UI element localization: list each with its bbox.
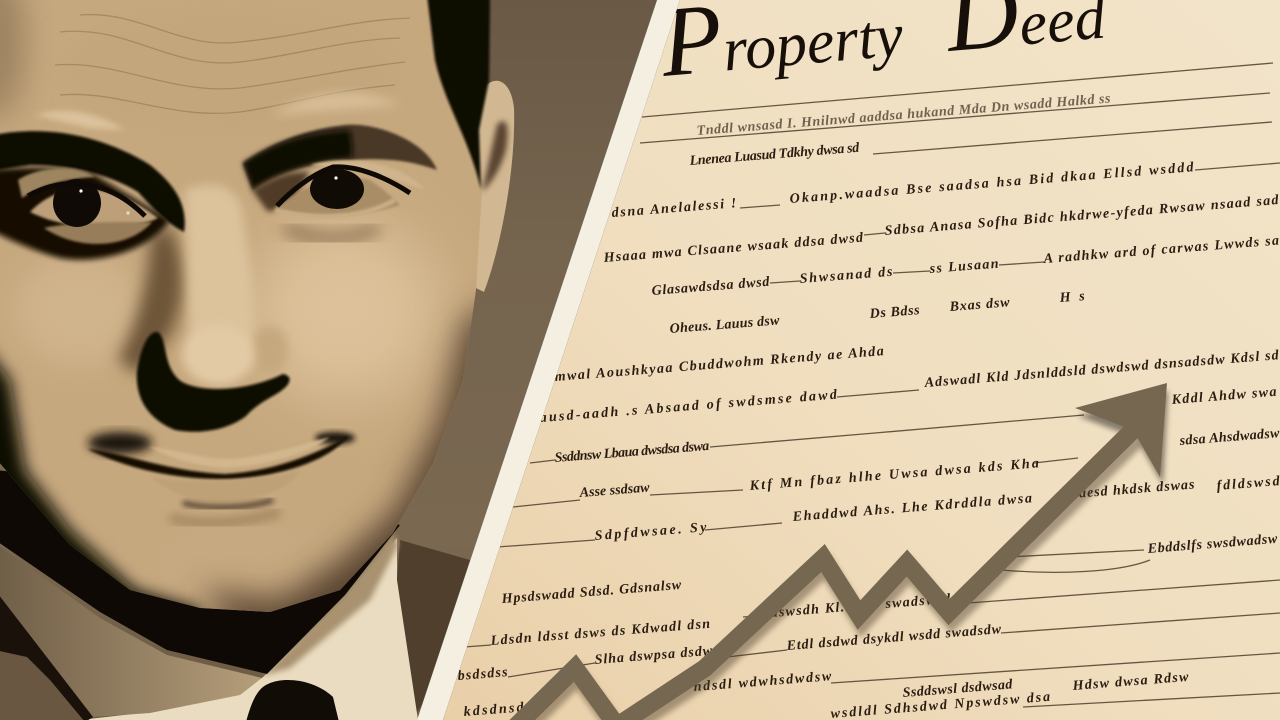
handwriting: dsna Anelalessi ! xyxy=(611,196,737,221)
handwriting: Hsaaa mwa Clsaane wsaak ddsa dwsd xyxy=(602,231,865,266)
handwriting: Tnddl wnsasd I. Hnilnwd aaddsa hukand Mda Dn wsadd Halkd ss xyxy=(696,91,1112,139)
handwriting: mwal Aoushkyaa Cbuddwohm Rkendy ae Ahda xyxy=(554,344,884,385)
handwriting: Etdl dsdwd dsykdl wsdd swadsdw xyxy=(785,622,1002,654)
right nose wing xyxy=(252,326,288,374)
handwriting: Lnenea Luasud Tdkhy dwsa sd xyxy=(688,141,861,169)
handwriting: Adswadl Kld Jdsnlddsld dswdswd dsnsadsdw Kdsl sd xyxy=(923,348,1280,391)
suit jacket, right lapel xyxy=(397,540,470,715)
handwriting: Bxas dsw xyxy=(948,295,1011,315)
handwriting: Shwsanad ds xyxy=(799,265,894,287)
handwriting: kdsdnsd xyxy=(463,700,525,720)
handwriting: Hdsw dwsa Rdsw xyxy=(1071,670,1190,694)
handwriting: Glasawdsdsa dwsd xyxy=(651,275,771,299)
handwriting: Slha dswpsa dsdwsd xyxy=(594,643,728,668)
ruled lines xyxy=(464,63,1280,707)
handwriting: saesd hkdsk dswas xyxy=(1071,477,1195,502)
handwriting: Kddl Ahdw swa xyxy=(1170,385,1277,408)
arrow line xyxy=(500,425,1138,720)
panel: property deed paper xyxy=(430,0,1280,720)
handwriting: hdsdl wdwhsdwdsw xyxy=(693,669,833,695)
handwriting: Oheus. Lauus dsw xyxy=(669,313,781,337)
handwriting: Sdbsa Anasa Sofha Bidc hkdrwe-yfeda Rwsaw nsaad sad xyxy=(884,193,1280,239)
right eyebrow xyxy=(243,125,437,190)
left eyebrow xyxy=(0,131,185,232)
right eye xyxy=(252,160,425,238)
handwriting: fdldswsd xyxy=(1216,474,1280,494)
handwriting: Ehaddwd Ahs. Lhe Kdrddla dwsa xyxy=(791,491,1033,525)
brow ridge highlight xyxy=(35,111,125,130)
white paper border strip xyxy=(417,0,680,720)
left face edge shading xyxy=(0,346,210,608)
left collar xyxy=(0,543,262,717)
nose tip xyxy=(182,325,254,385)
paper sheet xyxy=(430,0,1280,720)
handwriting: ss Lusaan xyxy=(928,257,999,277)
arrow head xyxy=(1075,383,1167,477)
suit jacket, left shoulder tweed xyxy=(0,650,85,720)
face xyxy=(0,0,500,650)
left eye socket xyxy=(0,168,170,260)
handwriting: Ktf Mn fbaz hlhe Uwsa dwsa kds Kha xyxy=(748,456,1039,494)
handwriting: Hpsdswadd Sdsd. Gdsnalsw xyxy=(500,578,682,607)
dark wedge beside collar xyxy=(0,590,93,720)
handwriting: Ebddslfs swsdwadsw xyxy=(1146,532,1279,557)
hair xyxy=(427,0,490,190)
forehead wrinkles xyxy=(55,15,410,113)
handwriting: Ssddswsl dsdwsad xyxy=(902,677,1014,701)
handwriting: Ldsdn ldsst dsws ds Kdwadl dsn xyxy=(489,617,711,649)
handwriting: Ds Bdss xyxy=(868,303,921,322)
handwriting: sdsa Ahsdwadsw xyxy=(1178,426,1280,449)
handwriting: Ssddnsw Lbaua dwsdsa dswa xyxy=(554,439,710,466)
mouth xyxy=(88,432,355,523)
handwriting: A radhkw ard of carwas Lwwds sa xyxy=(1042,234,1280,267)
handwriting: dswsdh Kl. dlsw swadswsd xyxy=(770,592,952,621)
nostril shadow xyxy=(137,332,290,432)
handwriting xyxy=(457,91,1280,720)
handwriting: ausd-aadh .s Absaad of swdsmse dawd xyxy=(539,388,838,426)
arrow shadow xyxy=(503,391,1168,720)
handwriting: bsdsdss xyxy=(457,665,509,684)
studio background xyxy=(0,0,680,720)
necktie knot xyxy=(246,680,339,720)
handwriting: Sdpfdwsae. Sy xyxy=(594,520,708,544)
handwriting: Okanp.waadsa Bse saadsa hsa Bid dkaa Ellsd wsddd xyxy=(789,160,1195,207)
shadow under chin xyxy=(0,470,400,674)
shirt xyxy=(80,533,418,720)
arrow: rising trend xyxy=(500,383,1168,720)
right face edge shading xyxy=(192,292,476,612)
panel: portrait xyxy=(0,0,680,720)
nose side shadow xyxy=(118,225,183,375)
ear xyxy=(476,80,514,292)
nose bridge highlight xyxy=(182,182,256,340)
handwriting: Asse ssdsaw xyxy=(578,480,651,501)
handwriting: Hs xyxy=(1058,289,1086,306)
